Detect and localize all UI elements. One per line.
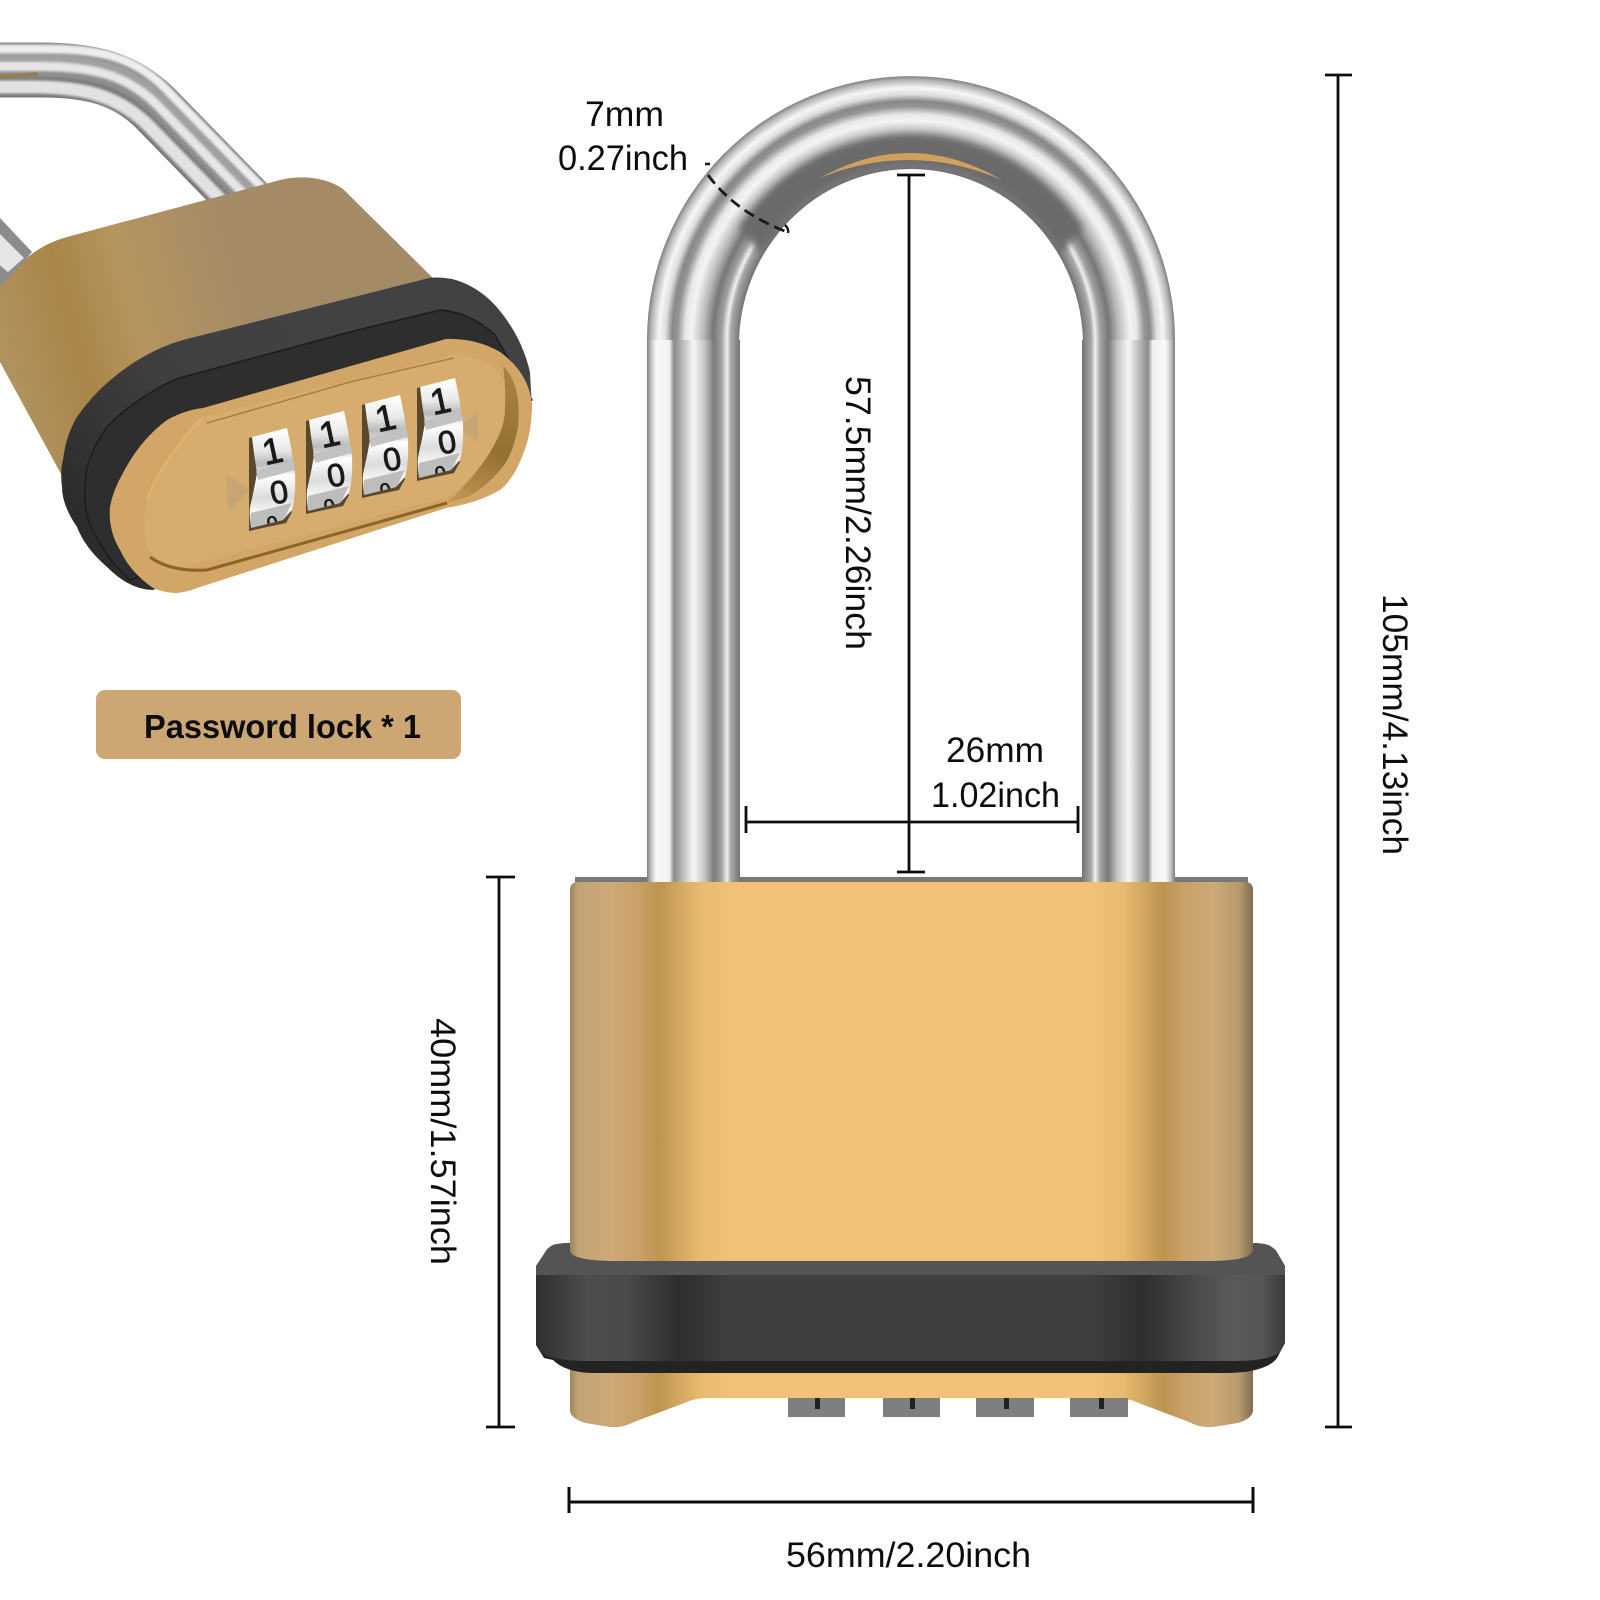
dimension: inner width 26mm: 1.02inch: [931, 776, 1060, 815]
dimension: total height 105mm: 105mm/4.13inch: [1375, 594, 1414, 855]
dial 4: 0: [433, 462, 448, 486]
badge: Password lock * 1: Password lock * 1: [144, 708, 421, 745]
dial 3: 1: [371, 396, 399, 440]
inset shackle rear leg: [0, 218, 32, 290]
dial 4: 0: [435, 423, 459, 461]
dimension: inner width 26mm: [746, 731, 1078, 833]
main padlock: [536, 76, 1285, 1427]
dimension: body width 56mm: 56mm/2.20inch: [786, 1536, 1031, 1575]
dimension: inner height 57.5mm: 57.5mm/2.26inch: [838, 376, 877, 650]
rubber band: [536, 1243, 1285, 1373]
inset: angled close-up of the combination lock: [0, 49, 532, 593]
inset lock body: [0, 177, 440, 474]
inset gold face: [110, 339, 532, 593]
dial 2: 0: [322, 495, 337, 519]
lower gold base: [570, 1360, 1253, 1427]
dimension: body height 40mm: 40mm/1.57inch: [423, 1018, 462, 1265]
dimension: body width 56mm: [569, 1487, 1253, 1575]
dimension: inner height 57.5mm: [838, 175, 925, 872]
dial 3: 0: [380, 440, 404, 478]
shackle top edge strip behind body: [575, 877, 1248, 885]
dial 1: 0: [267, 473, 291, 511]
inset face crescent: [447, 366, 519, 503]
dial 2: 0: [324, 456, 348, 494]
badge: Password lock * 1: [96, 690, 461, 759]
dimension: inner width 26mm: 26mm: [946, 731, 1044, 770]
dial 2: 1: [315, 412, 343, 456]
inset rubber band: [61, 278, 532, 590]
dimension: shackle thickness: [558, 95, 788, 233]
dimension: total height 105mm: [1325, 75, 1414, 1427]
dial 3: [362, 395, 408, 503]
dial tabs: [788, 1398, 1128, 1417]
dial 2: [306, 411, 352, 519]
dial 4: 1: [426, 379, 454, 423]
inset face plate: [144, 355, 505, 567]
dimension: shackle thickness: 0.27inch: [558, 139, 688, 178]
dial 3: 0: [378, 479, 393, 503]
shackle: [647, 76, 1175, 883]
inset shackle: [0, 49, 279, 243]
dial 1: 0: [265, 512, 280, 536]
dial 4: [417, 378, 463, 486]
inset faint arrows beside dials: [226, 412, 478, 512]
dimension: shackle thickness: 7mm: [585, 95, 664, 134]
dial 1: 1: [258, 429, 286, 473]
upper gold body: [570, 882, 1253, 1261]
dial 1: [249, 428, 295, 536]
dimension: body height 40mm: [423, 877, 515, 1427]
